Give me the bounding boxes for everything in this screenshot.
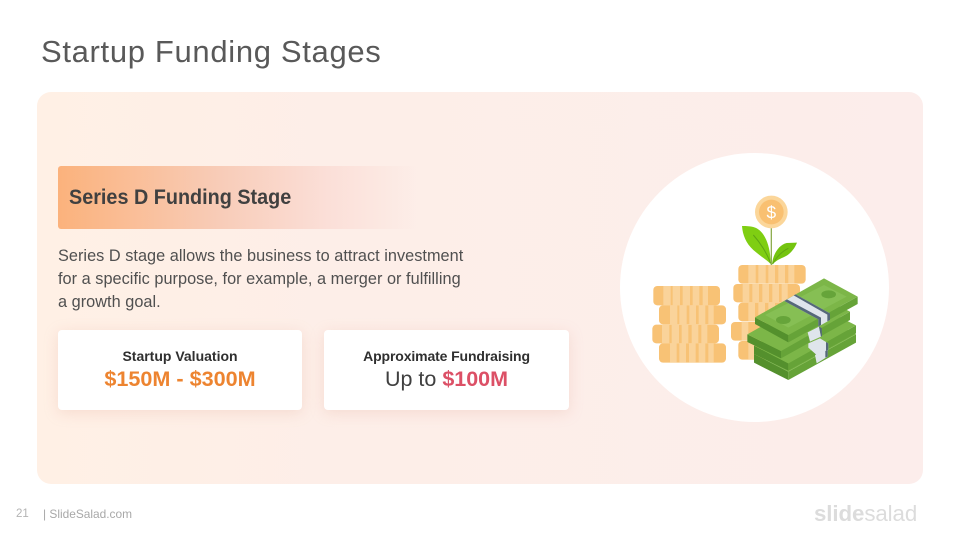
heading text: Series D Funding Stage [69, 186, 291, 209]
card value: Up to $100M [385, 367, 508, 391]
card label: Startup Valuation [122, 348, 238, 364]
illustration: money and coins [620, 153, 889, 422]
icon: left coin stack [652, 286, 726, 363]
icon: stack of green banknotes [747, 278, 858, 380]
icon: plant with dollar coin [742, 196, 797, 265]
card value: $150M - $300M [104, 366, 256, 391]
description text [58, 247, 464, 311]
card label: Approximate Fundraising [363, 348, 530, 364]
logo wordmark: slidesalad [814, 501, 917, 526]
page number: 21 [16, 508, 29, 520]
white circle [620, 153, 889, 422]
panel: background [37, 92, 923, 484]
footer source: | SlideSalad.com [43, 507, 132, 521]
description text: Series D stage allows the business to attract investment [58, 247, 463, 265]
heading band [58, 166, 418, 229]
card: approximate fundraising [324, 330, 569, 410]
icon: middle coin stack [731, 265, 806, 360]
card: startup valuation [58, 330, 302, 410]
bank note band [784, 294, 830, 327]
dollar sign: $ [767, 202, 777, 222]
description text: a growth goal. [58, 293, 161, 311]
description text: for a specific purpose, for example, a merger or fulfilling [58, 270, 461, 288]
title: Startup Funding Stages [41, 34, 381, 69]
